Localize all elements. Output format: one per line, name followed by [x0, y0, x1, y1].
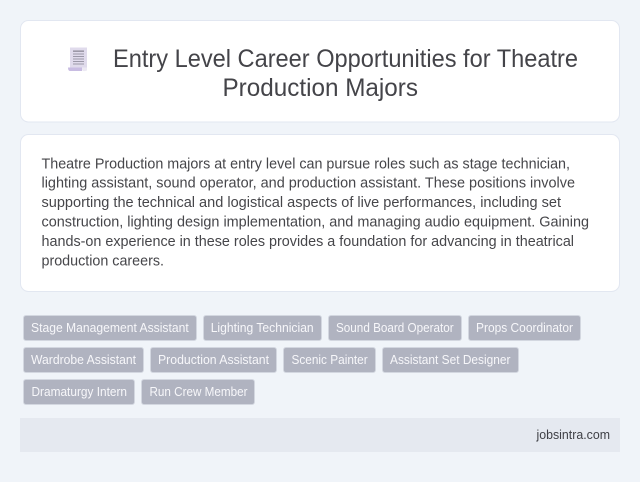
tag: Production Assistant	[150, 348, 276, 372]
tag: Run Crew Member	[142, 380, 254, 404]
tag: Props Coordinator	[468, 316, 580, 340]
text block: description: hands-on experience in these roles provides a foundation for advancing in theatrical	[42, 234, 574, 250]
panel: description	[20, 134, 620, 292]
panel: title header	[20, 20, 620, 122]
heading: Entry Level Career Opportunities for Theatre	[113, 45, 578, 73]
text block: description: lighting assistant, sound operator, and production assistant. These positions involve	[42, 176, 575, 192]
text block: description: supporting the technical and logistical aspects of live performances, including set	[42, 195, 561, 211]
footer bar	[20, 418, 620, 452]
tag: Scenic Painter	[284, 348, 376, 372]
tag: Lighting Technician: Lighting Technician	[211, 320, 314, 335]
text block: description: construction, lighting design implementation, and managing audio equipment. Gaining	[42, 215, 589, 231]
text block: description	[42, 156, 589, 270]
tag: Scenic Painter: Scenic Painter	[292, 352, 368, 367]
tag: Stage Management Assistant: Stage Management Assistant	[31, 320, 189, 335]
tag: Stage Management Assistant	[24, 316, 196, 340]
tag: Wardrobe Assistant: Wardrobe Assistant	[31, 352, 136, 367]
heading: Production Majors	[222, 74, 418, 102]
tag: Wardrobe Assistant	[24, 348, 144, 372]
text block: description: production careers.	[42, 254, 164, 270]
text block: description: Theatre Production majors at entry level can pursue roles such as stage technician,	[42, 156, 570, 172]
tag: Sound Board Operator	[328, 316, 462, 340]
tag: Dramaturgy Intern	[24, 380, 134, 404]
tag list	[24, 316, 580, 404]
heading	[113, 45, 578, 102]
tag: Run Crew Member: Run Crew Member	[150, 384, 248, 399]
tag: Assistant Set Designer	[382, 348, 518, 372]
tag: Props Coordinator: Props Coordinator	[476, 320, 574, 335]
tag: Dramaturgy Intern: Dramaturgy Intern	[32, 384, 127, 399]
tag: Production Assistant: Production Assistant	[158, 352, 269, 367]
footer source text: jobsintra.com	[536, 427, 610, 442]
tag: Assistant Set Designer: Assistant Set Designer	[390, 352, 511, 367]
icon: paper scroll	[68, 48, 87, 71]
tag: Sound Board Operator: Sound Board Operator	[336, 320, 454, 335]
tag: Lighting Technician	[204, 316, 322, 340]
